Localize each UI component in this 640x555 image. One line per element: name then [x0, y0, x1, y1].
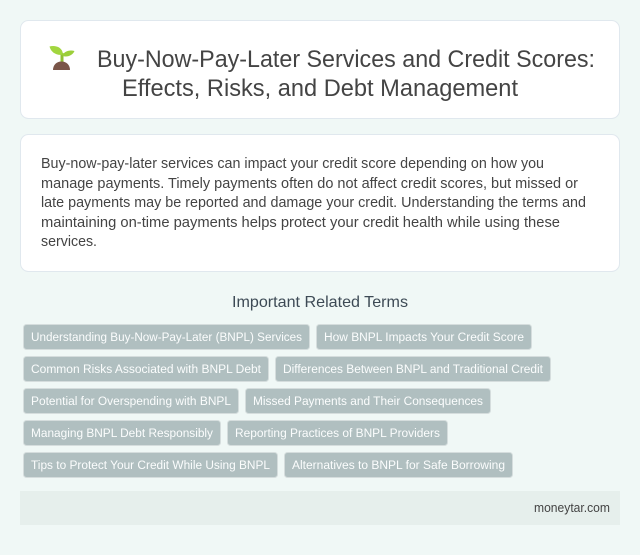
- tag: understanding BNPL: [24, 324, 310, 350]
- tag: reporting practices: [228, 420, 448, 446]
- tag: overspending: [24, 388, 238, 414]
- text block: summary: manage payments. Timely payments often do not affect credit scores, but missed or: [41, 176, 578, 192]
- text block: summary: Buy-now-pay-later services can impact your credit score depending on how you: [41, 156, 544, 172]
- tag: overspending: Potential for Overspending with BNPL: [31, 394, 231, 408]
- tag: common risks: Common Risks Associated with BNPL Debt: [31, 362, 262, 376]
- icon: sprout: [50, 46, 74, 70]
- tag: missed payments: Missed Payments and Their Consequences: [253, 394, 483, 408]
- panel: term tags: [24, 324, 550, 478]
- tag: differences: Differences Between BNPL and Traditional Credit: [283, 362, 544, 376]
- text block: summary: maintaining on-time payments helps protect your credit health while using these: [41, 215, 560, 231]
- tag: missed payments: [246, 388, 490, 414]
- text block: summary: late payments may be reported and damage your credit. Understanding the terms and: [41, 195, 586, 211]
- panel: title card: [20, 20, 620, 118]
- footer: source: moneytar.com: [534, 501, 610, 515]
- text block: summary: services.: [41, 234, 97, 250]
- tag: protect credit: Tips to Protect Your Credit While Using BNPL: [31, 458, 270, 472]
- tag: credit score impact: How BNPL Impacts Your Credit Score: [324, 330, 524, 344]
- tag: alternatives: Alternatives to BNPL for Safe Borrowing: [292, 458, 505, 472]
- title: Buy-Now-Pay-Later Services and Credit Scores:: [97, 46, 595, 73]
- tag: managing debt: Managing BNPL Debt Responsibly: [31, 426, 214, 440]
- heading: related terms: Important Related Terms: [232, 294, 408, 311]
- tag: understanding BNPL: Understanding Buy-Now-Pay-Later (BNPL) Services: [31, 330, 302, 344]
- tag: managing debt: [24, 420, 220, 446]
- tag: alternatives: [284, 452, 512, 478]
- footer: [20, 491, 620, 525]
- tag: differences: [276, 356, 550, 382]
- title: Effects, Risks, and Debt Management: [122, 75, 518, 102]
- tag: reporting practices: Reporting Practices of BNPL Providers: [235, 426, 440, 440]
- tag: common risks: [24, 356, 268, 382]
- tag: credit score impact: [316, 324, 532, 350]
- tag: protect credit: [24, 452, 278, 478]
- panel: summary card: [20, 134, 620, 272]
